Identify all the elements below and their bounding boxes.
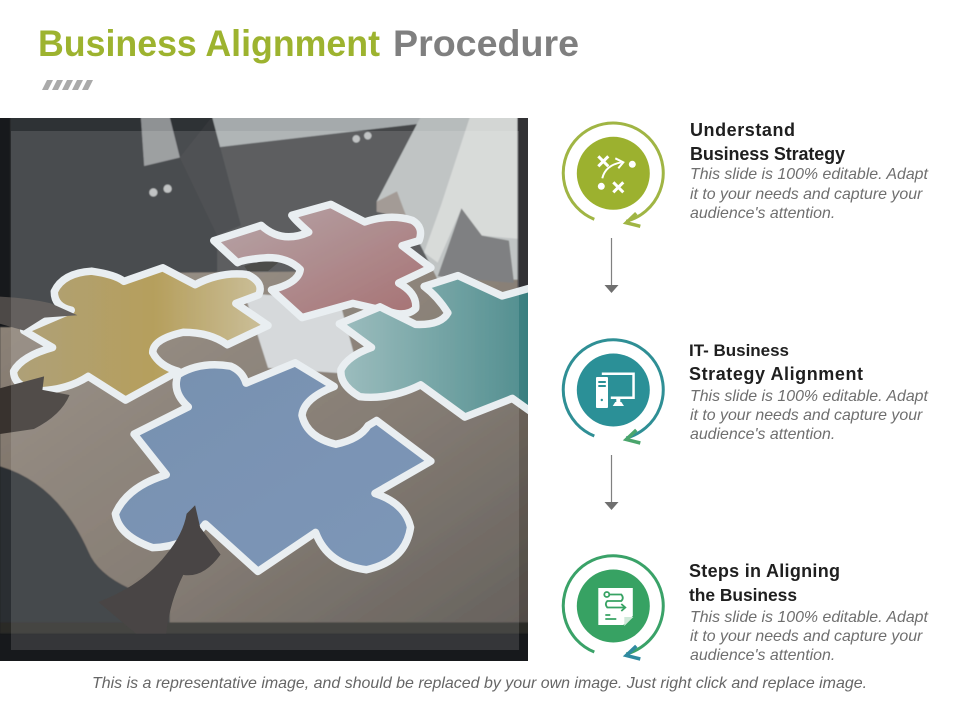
- hand: left upper: [0, 297, 77, 331]
- title: [38, 23, 579, 64]
- step 3 heading: [689, 561, 840, 605]
- photo translucent overlay: [11, 131, 519, 650]
- photo background: bottom-left person: [0, 466, 170, 634]
- photo background: people and cabinet: [10, 118, 218, 328]
- puzzle piece: yellow: [14, 268, 268, 400]
- step 2 description: audience's attention.: [690, 426, 835, 443]
- hand and arm: bottom: [98, 505, 221, 634]
- step 1 description: it to your needs and capture your: [690, 186, 923, 203]
- photo background: wood table: [0, 269, 530, 634]
- step 2 description: it to your needs and capture your: [690, 407, 923, 424]
- step 3: icon with circular arrow: [563, 556, 663, 659]
- step 2 heading: Strategy Alignment: [689, 364, 863, 384]
- icon: process document: [598, 588, 633, 626]
- step 3 heading: the Business: [689, 585, 797, 605]
- step 1 description: This slide is 100% editable. Adapt: [690, 166, 928, 183]
- photo: hands joining puzzle pieces: [0, 117, 536, 661]
- step 3 description: audience's attention.: [690, 647, 835, 664]
- puzzle piece: red: [214, 204, 431, 318]
- step 1 heading: Understand: [690, 120, 795, 140]
- photo background: person with jacket: [377, 117, 519, 280]
- step 2 heading: [689, 341, 863, 384]
- step 1 description: audience's attention.: [690, 205, 835, 222]
- step 1: icon with circular arrow: [563, 123, 663, 226]
- step 2: icon with circular arrow: [563, 340, 663, 443]
- step 1 description: [690, 166, 928, 222]
- arrow: step 2 to 3: [604, 455, 618, 510]
- step 3 description: This slide is 100% editable. Adapt: [690, 609, 928, 626]
- hand: top centre: [244, 262, 278, 271]
- title accent stripes: [42, 80, 93, 90]
- step 3 description: [690, 609, 928, 664]
- title: Procedure: [393, 23, 579, 64]
- title: Business Alignment: [38, 23, 380, 64]
- icon: strategy play: [598, 156, 636, 192]
- arrow: step 1 to 2: [604, 238, 618, 293]
- step 2 description: [690, 388, 928, 443]
- hand: left lower: [0, 376, 70, 434]
- puzzle piece: blue: [115, 363, 431, 571]
- step 3 heading: Steps in Aligning: [689, 561, 840, 581]
- footer note: This is a representative image, and should be replaced by your own image. Just right click and replace image.: [92, 675, 867, 692]
- step 3 description: it to your needs and capture your: [690, 628, 923, 645]
- puzzle piece: teal: [339, 276, 536, 417]
- step 1 heading: [690, 120, 845, 164]
- icon: desktop computer: [596, 372, 635, 408]
- step 2 description: This slide is 100% editable. Adapt: [690, 388, 928, 405]
- step 1 heading: Business Strategy: [690, 144, 845, 164]
- step 2 heading: IT- Business: [689, 341, 789, 360]
